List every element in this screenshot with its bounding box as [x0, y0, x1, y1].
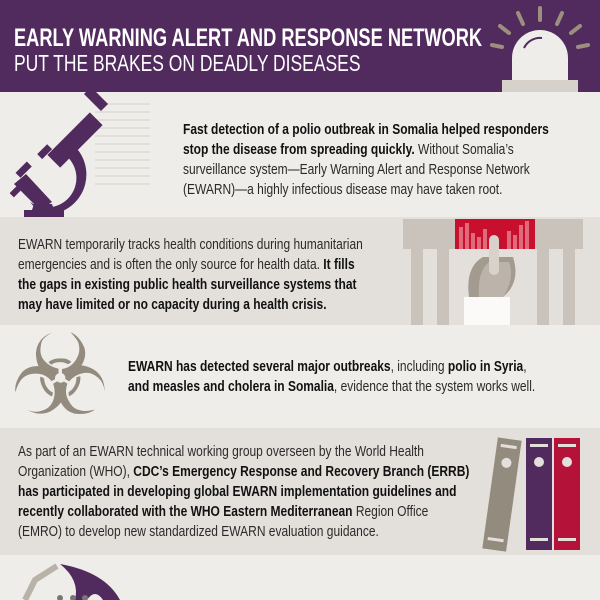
header	[0, 0, 600, 92]
title: EARLY WARNING ALERT AND RESPONSE NETWORK	[14, 24, 482, 52]
text: working group: has participated in developing global EWARN implementation guidelines and	[18, 484, 456, 500]
panel: fast detection	[0, 92, 600, 217]
text: working group: Organization (WHO), CDC’s Emergency Response and Recovery Branch (ERRB)	[18, 464, 469, 480]
text: fast detection	[183, 122, 549, 198]
icon: hand and leaf	[22, 564, 120, 600]
icon: siren	[490, 6, 590, 92]
icon: binders	[482, 437, 580, 552]
text: outbreaks: and measles and cholera in Somalia, evidence that the system works well.	[128, 379, 535, 395]
text: working group: (EMRO) to develop new standardized EWARN evaluation guidance.	[18, 524, 379, 540]
text: working group: As part of an EWARN technical working group overseen by the World Health	[18, 444, 424, 460]
text: tracks health: the gaps in existing public health surveillance systems that	[18, 277, 357, 293]
icon: hand on data screen	[403, 219, 583, 325]
text: fast detection: surveillance system—Early Warning Alert and Response Network	[183, 162, 530, 178]
subtitle: PUT THE BRAKES ON DEADLY DISEASES	[14, 50, 360, 76]
text: tracks health: may have limited or no capacity during a health crisis.	[18, 297, 327, 313]
panel: tracks health	[0, 217, 600, 325]
text: outbreaks	[128, 359, 535, 395]
panel: working group	[0, 428, 600, 555]
text: working group	[18, 444, 469, 540]
text: tracks health: EWARN temporarily tracks health conditions during humanitarian	[18, 237, 363, 253]
text: tracks health	[18, 237, 363, 313]
text: fast detection: Fast detection of a polio outbreak in Somalia helped responders	[183, 122, 549, 138]
text: fast detection: (EWARN)—a highly infectious disease may have taken root.	[183, 182, 502, 198]
text: fast detection: stop the disease from spreading quickly. Without Somalia’s	[183, 142, 514, 158]
icon: microscope	[10, 92, 150, 217]
icon: biohazard: ☣	[10, 311, 110, 441]
text: outbreaks: EWARN has detected several major outbreaks, including polio in Syria,	[128, 359, 527, 375]
text: tracks health: emergencies and is often the only source for health data. It fills	[18, 257, 355, 273]
panel: outbreaks	[0, 325, 600, 428]
text: working group: recently collaborated with the WHO Eastern Mediterranean Region Office	[18, 504, 428, 520]
